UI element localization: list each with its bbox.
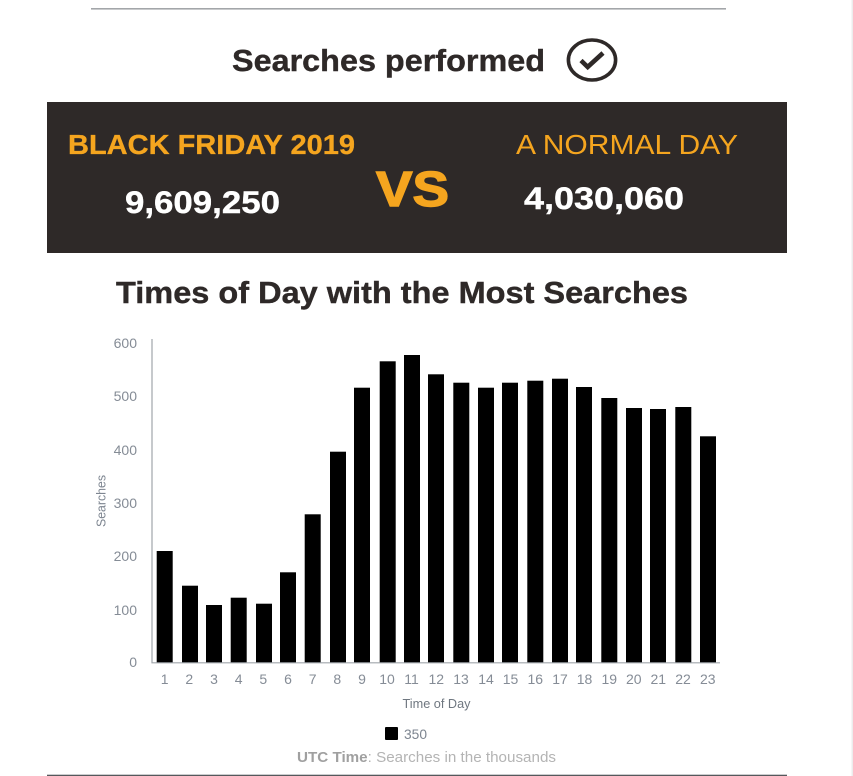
x axis title: Time of Day — [402, 696, 471, 711]
y axis labels: 300 — [114, 495, 137, 511]
icon: check mark in circle — [568, 40, 616, 80]
x axis labels: 3 — [210, 671, 218, 687]
x axis labels: 6 — [284, 671, 292, 687]
panel: comparison banner — [47, 102, 787, 253]
x axis labels: 7 — [309, 671, 317, 687]
y axis title: Searches — [94, 475, 108, 527]
x axis labels: 1 — [161, 671, 169, 687]
axes — [152, 339, 720, 663]
bars — [157, 355, 716, 663]
y axis labels: 100 — [114, 602, 137, 618]
x axis labels: 13 — [453, 671, 469, 687]
label: Black Friday 2019: BLACK FRIDAY 2019 — [68, 129, 355, 160]
y axis labels: 500 — [114, 388, 137, 404]
x axis labels: 16 — [528, 671, 543, 687]
x axis labels: 23 — [700, 671, 716, 687]
x axis labels: 15 — [503, 671, 518, 687]
legend — [385, 727, 427, 742]
x axis labels: 20 — [626, 671, 642, 687]
x axis labels — [161, 671, 716, 687]
x axis labels: 11 — [404, 671, 419, 687]
x axis labels: 12 — [429, 671, 444, 687]
heading: searches performed: Searches performed — [232, 43, 545, 78]
y axis labels: 0 — [129, 654, 137, 670]
x axis labels: 5 — [259, 671, 267, 687]
x axis labels: 4 — [235, 671, 243, 687]
x axis labels: 8 — [333, 671, 341, 687]
y axis labels: 400 — [114, 442, 137, 458]
x axis labels: 19 — [602, 671, 617, 687]
heading: times of day: Times of Day with the Most Searches — [116, 275, 688, 310]
x axis labels: 21 — [651, 671, 666, 687]
x axis labels: 10 — [379, 671, 395, 687]
x axis labels: 17 — [552, 671, 568, 687]
bar chart: searches by hour — [94, 335, 720, 742]
caption: UTC time note: UTC Time: Searches in the thousands — [297, 750, 556, 766]
x axis labels: 22 — [675, 671, 691, 687]
x axis labels: 14 — [478, 671, 494, 687]
value: normal day searches: 4,030,060 — [524, 180, 684, 216]
x axis labels: 9 — [358, 671, 366, 687]
y axis labels: 200 — [114, 548, 137, 564]
y axis labels — [114, 335, 137, 670]
y axis labels: 600 — [114, 335, 137, 351]
legend: 350 — [404, 727, 427, 742]
label: VS: VS — [376, 163, 449, 217]
x axis labels: 18 — [577, 671, 592, 687]
x axis labels: 2 — [185, 671, 193, 687]
value: Black Friday searches: 9,609,250 — [125, 184, 280, 220]
label: a normal day: A NORMAL DAY — [516, 129, 738, 160]
